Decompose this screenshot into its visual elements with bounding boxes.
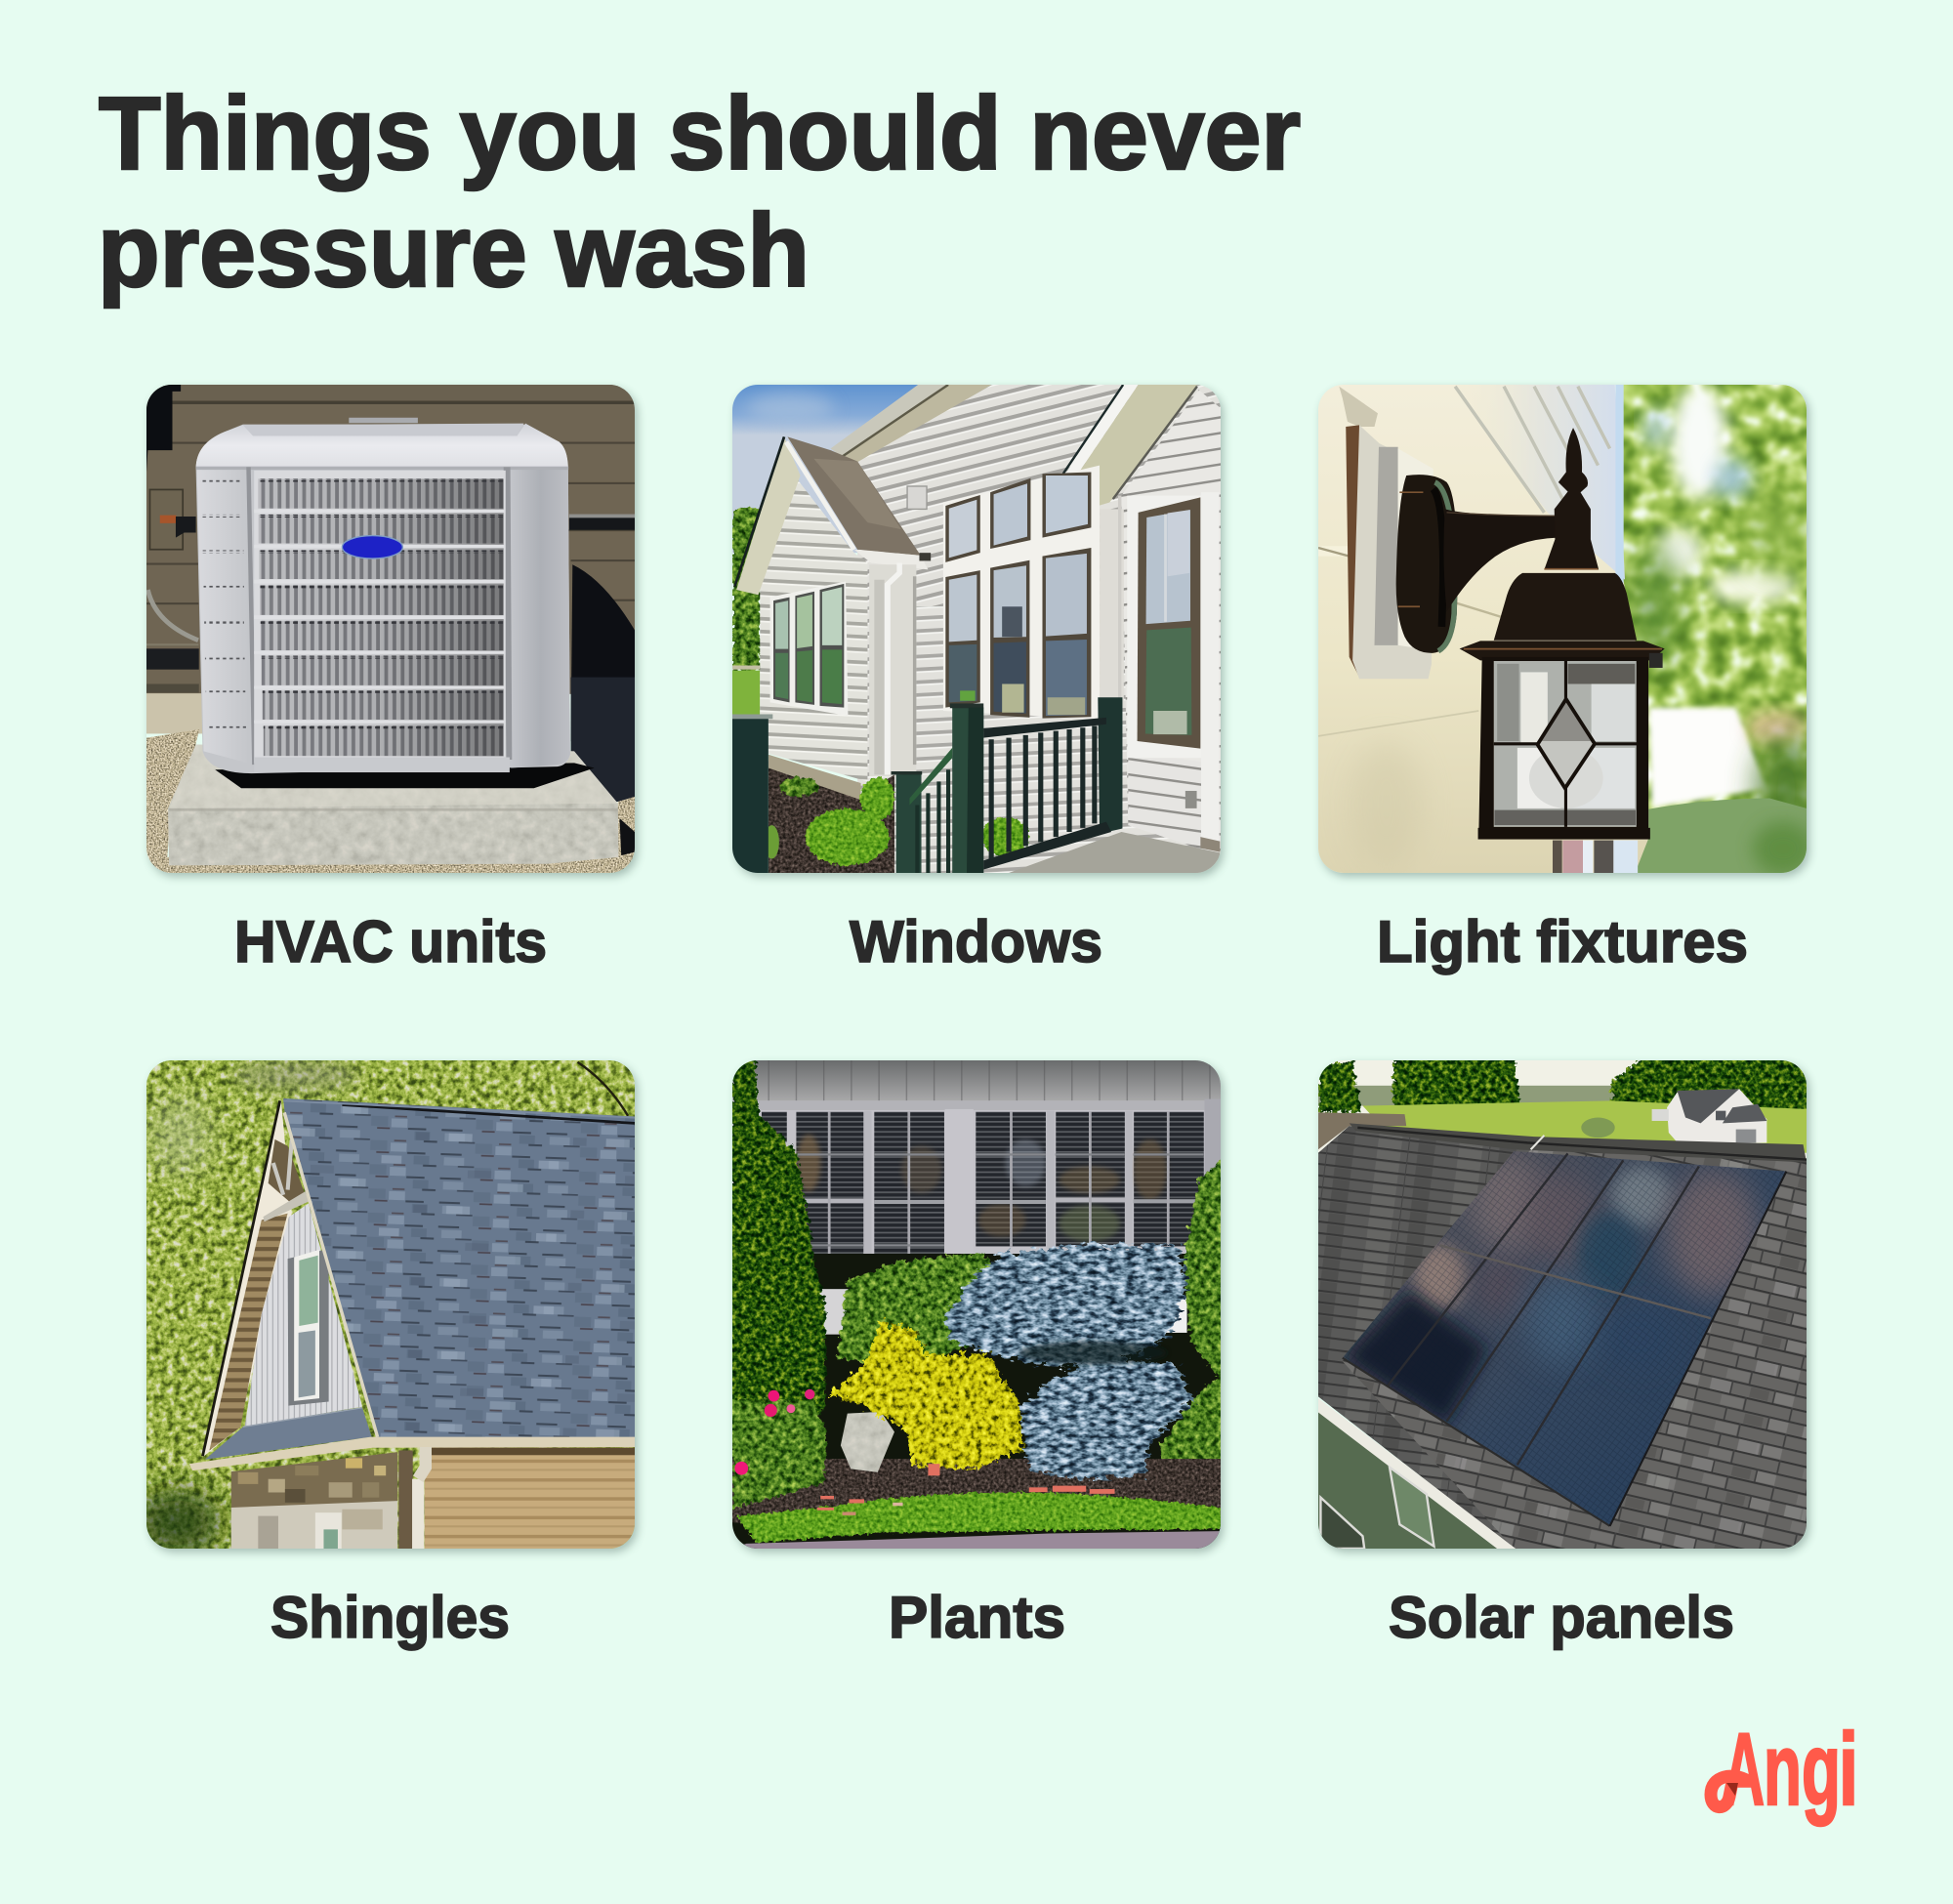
gravel [146, 729, 635, 874]
panel: Solar panels [1316, 1059, 1814, 1650]
mulch bed [732, 1459, 1221, 1522]
logo: Angi: i [1839, 1713, 1858, 1827]
mid green shrub [837, 1254, 1016, 1368]
tall thuja shrub [727, 1052, 825, 1442]
mulch and shrubs [765, 755, 1029, 873]
dark garden base [732, 1254, 1221, 1549]
lower small roof [189, 1408, 635, 1470]
windows with blinds [762, 1099, 1221, 1288]
panel: HVAC units [145, 384, 643, 974]
tan siding and downspout [398, 1447, 635, 1549]
lantern [1460, 428, 1665, 840]
wall bracket and arm [1396, 475, 1558, 653]
blue logo badge [342, 536, 402, 559]
main facade siding [857, 385, 1221, 606]
trees background [134, 1052, 644, 1556]
photo: solar panel array on a shingled roof [1318, 1060, 1807, 1549]
panel: Shingles [145, 1059, 643, 1651]
right window [1138, 497, 1200, 749]
background tree line [1318, 1055, 1813, 1112]
center grid windows [943, 466, 1100, 720]
label: HVAC units: HVAC units [234, 909, 547, 974]
title [98, 76, 1301, 309]
wall [1318, 385, 1648, 873]
pipes below lantern [1553, 841, 1638, 874]
photo: outdoor HVAC condenser unit on concrete pad [146, 385, 635, 873]
label: Shingles: Shingles [270, 1585, 510, 1650]
blurred foliage background [1615, 378, 1816, 876]
green house wall and white fascia [1318, 1398, 1516, 1549]
right hedge [1160, 1160, 1227, 1475]
stone wall [231, 1452, 397, 1549]
label: Plants: Plants [889, 1585, 1065, 1650]
shingled roof [1318, 1123, 1807, 1549]
title: pressure wash [98, 193, 810, 309]
fallen leaves [817, 1464, 1115, 1515]
railing [732, 697, 1122, 873]
wall light [907, 486, 927, 509]
logo: Angi: A [1724, 1713, 1765, 1827]
main roof overhang [831, 385, 992, 462]
deck [1009, 832, 1221, 873]
neighbouring brown building [1318, 1112, 1406, 1149]
left gable wall [734, 436, 867, 781]
condenser unit body [196, 418, 570, 773]
logo: Angi: n [1764, 1713, 1802, 1827]
right gable roof [1059, 385, 1197, 507]
main shingle roof [283, 1098, 635, 1438]
dormer roof [787, 436, 921, 556]
logo: Angi [1705, 1713, 1858, 1828]
logo: Angi: g [1802, 1713, 1841, 1827]
downspout bay [869, 563, 916, 776]
photo: exterior wall lantern light fixture [1318, 385, 1807, 873]
porch soffit [732, 1060, 1221, 1101]
mounting plate [1339, 387, 1434, 679]
white gable wall [245, 1203, 362, 1427]
flowering bush with pink flowers [732, 1389, 827, 1510]
grille [254, 478, 505, 757]
panel: Light fixtures [1316, 384, 1814, 975]
grass strip [736, 1492, 1221, 1543]
left windows [770, 581, 848, 716]
label: Solar panels: Solar panels [1389, 1585, 1734, 1650]
photo: landscaped shrubs in front of house windows [732, 1060, 1221, 1549]
distant house [1652, 1089, 1766, 1146]
title: Things you should never [99, 76, 1301, 191]
blue spruce [945, 1244, 1193, 1479]
solar panel array [1343, 1151, 1786, 1526]
label: Windows: Windows [850, 909, 1102, 974]
panel: Windows [730, 384, 1228, 974]
rock [841, 1412, 894, 1472]
photo: steep house roof with blue-grey shingles [146, 1060, 635, 1549]
gable trim [203, 1099, 309, 1457]
yellow shrub [831, 1321, 1022, 1469]
panel: Plants [730, 1059, 1228, 1650]
concrete pad [168, 744, 618, 865]
road [732, 1531, 1221, 1549]
label: Light fixtures: Light fixtures [1377, 909, 1748, 974]
green field [1362, 1100, 1807, 1153]
photo: white sided house with large windows and dark railing [732, 385, 1221, 873]
